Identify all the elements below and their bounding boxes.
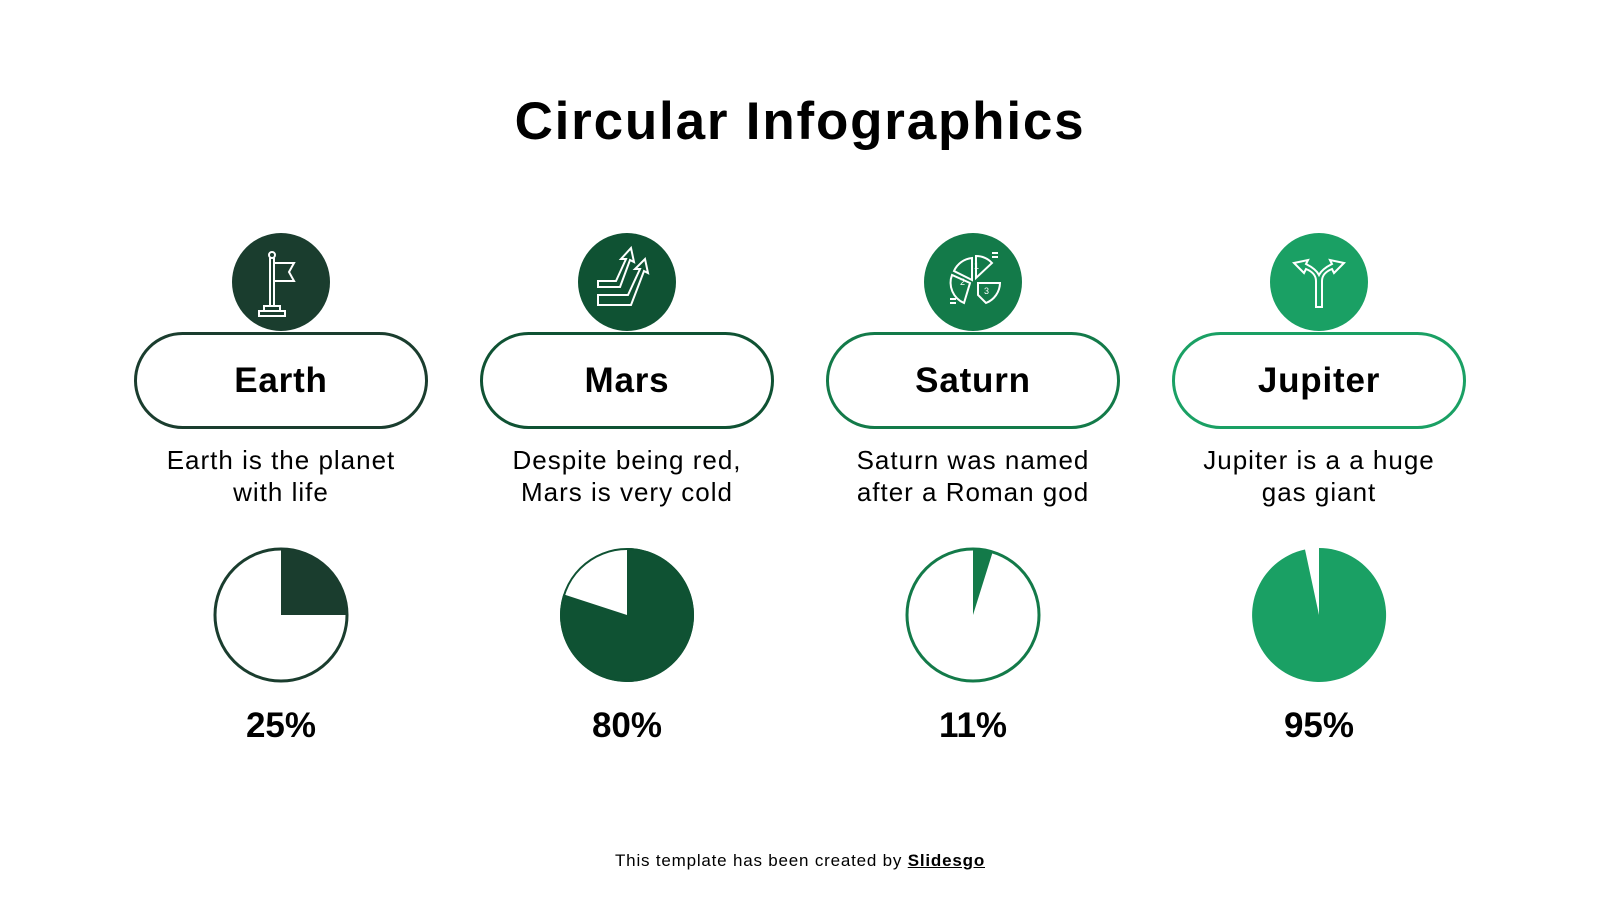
text: earth description: Earth is the planet	[167, 445, 395, 475]
percent: 25%	[246, 706, 316, 745]
percent: 95%	[1284, 706, 1354, 745]
pill: Earth	[134, 332, 428, 429]
icon: pie segments: 2	[960, 277, 965, 287]
icon: pie segments: 3	[984, 286, 989, 296]
text: mars description: Mars is very cold	[521, 477, 733, 507]
icon: pie segments: 1	[974, 261, 979, 271]
pie chart 25%	[214, 548, 348, 682]
panel: earth	[134, 233, 428, 745]
text: earth description	[167, 445, 395, 507]
text: saturn description: Saturn was named	[857, 445, 1089, 475]
pill: Jupiter	[1172, 332, 1466, 429]
icon: split arrow	[1270, 233, 1368, 331]
text: mars description	[512, 445, 742, 507]
pill: Jupiter: Jupiter	[1258, 361, 1380, 400]
pill: Mars: Mars	[585, 361, 669, 400]
text: saturn description: after a Roman god	[857, 477, 1089, 507]
text: jupiter description: Jupiter is a a huge	[1203, 445, 1435, 475]
footer credit: This template has been created by Slidesgo	[615, 851, 985, 870]
icon: pie segments	[924, 233, 1022, 331]
panel: jupiter	[1172, 233, 1466, 745]
panel: mars	[480, 233, 774, 745]
pill: Earth: Earth	[234, 361, 328, 400]
pie chart 11%	[906, 548, 1040, 682]
text: jupiter description	[1203, 445, 1435, 507]
title: Circular Infographics	[515, 92, 1085, 151]
text: saturn description	[857, 445, 1089, 507]
pill: Saturn: Saturn	[915, 361, 1031, 400]
percent: 11%	[939, 706, 1007, 745]
text: mars description: Despite being red,	[512, 445, 742, 475]
pill: Mars	[480, 332, 774, 429]
pie chart 95%	[1252, 548, 1386, 682]
text: earth description: with life	[233, 477, 329, 507]
panel: saturn	[826, 233, 1120, 745]
pie chart 80%	[560, 548, 694, 682]
pill: Saturn	[826, 332, 1120, 429]
percent: 80%	[592, 706, 662, 745]
icon: arrows up	[578, 233, 676, 331]
text: jupiter description: gas giant	[1262, 477, 1376, 507]
icon: flag	[232, 233, 330, 331]
